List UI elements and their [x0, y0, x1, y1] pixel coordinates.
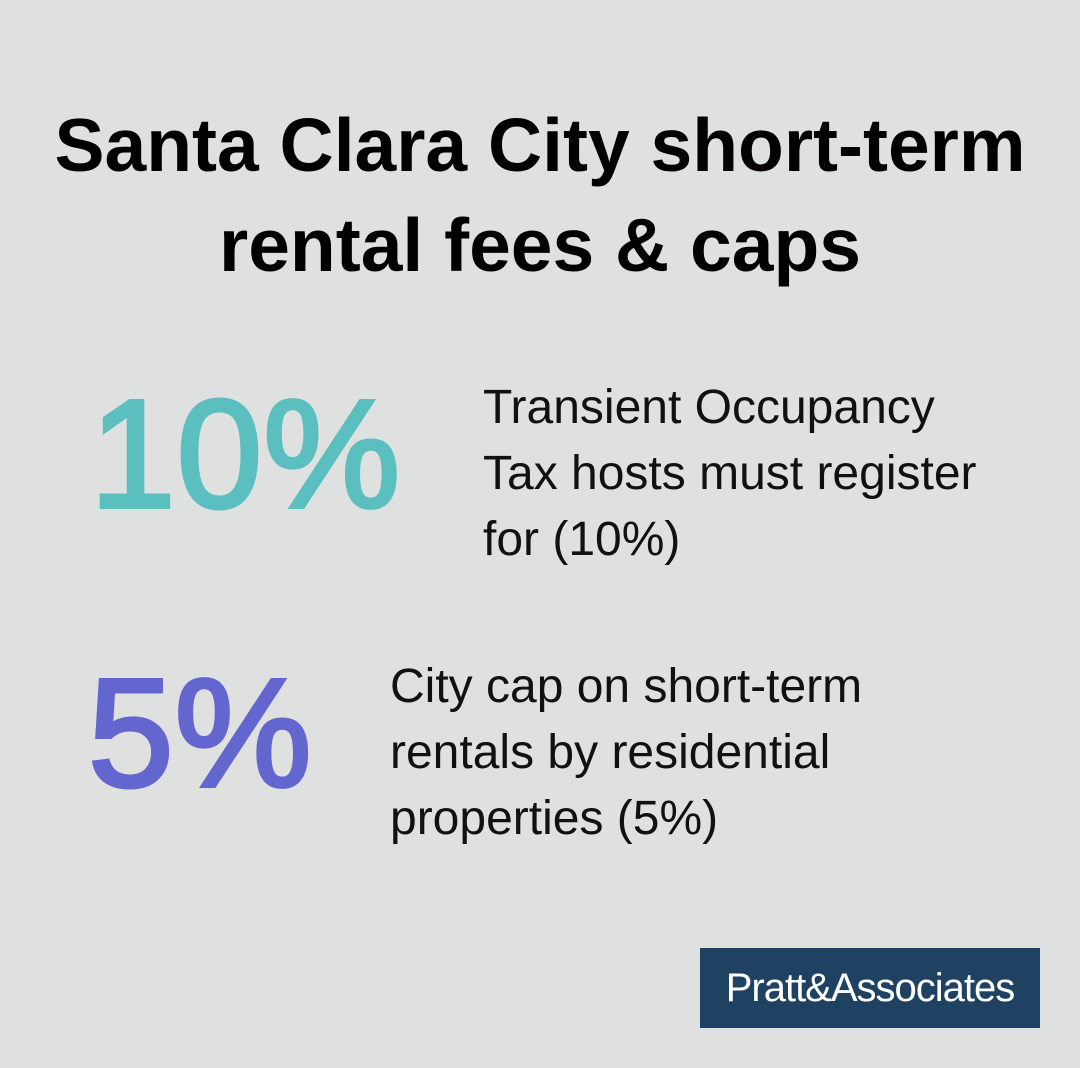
description 10%: Transient Occupancy Tax hosts must register for (10%): [483, 381, 976, 566]
description 5%: City cap on short-term rentals by residential properties (5%): [390, 660, 862, 845]
number 10%: 10%: [90, 368, 401, 540]
title: rental fees & caps: [219, 203, 861, 287]
stat: 5%: [88, 647, 862, 845]
logo: [700, 948, 1040, 1028]
number 5%: 5%: [88, 647, 313, 819]
title: [54, 103, 1026, 287]
title: Santa Clara City short-term: [54, 103, 1026, 187]
logo: Pratt&Associates: [726, 966, 1014, 1010]
stat: 10%: [90, 368, 976, 566]
